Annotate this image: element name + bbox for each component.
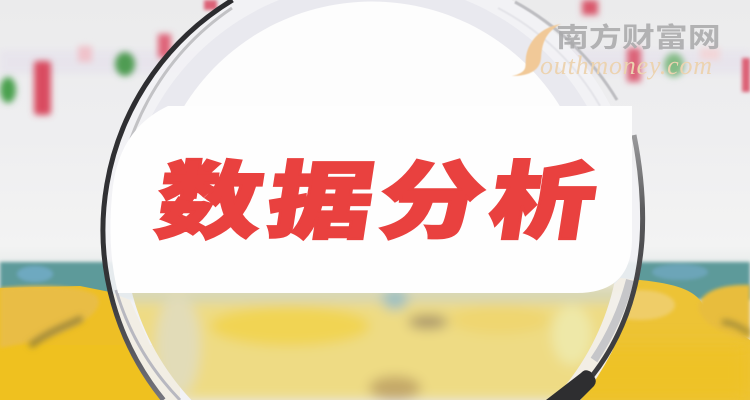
- background: candlestick chart: [0, 0, 750, 115]
- logo chinese name: 南方财富网: [556, 24, 721, 53]
- logo swoosh: [512, 24, 561, 76]
- magnifier handle: [546, 370, 596, 400]
- watermark logo: [512, 24, 721, 80]
- magnifying glass: [103, 0, 643, 400]
- lens rim: [103, 0, 641, 400]
- title: 数据分析: [150, 156, 608, 249]
- rim grey lines: [116, 2, 630, 400]
- white title panel: [110, 106, 632, 293]
- logo url: outhmoney.com: [540, 51, 713, 80]
- lens black frame left: [103, 0, 232, 400]
- background: teal band: [0, 262, 750, 300]
- inner white disc: [183, 2, 561, 293]
- lens interior: [120, 0, 630, 400]
- lens dark frame right: [592, 135, 643, 376]
- background: golden coins: [0, 278, 750, 400]
